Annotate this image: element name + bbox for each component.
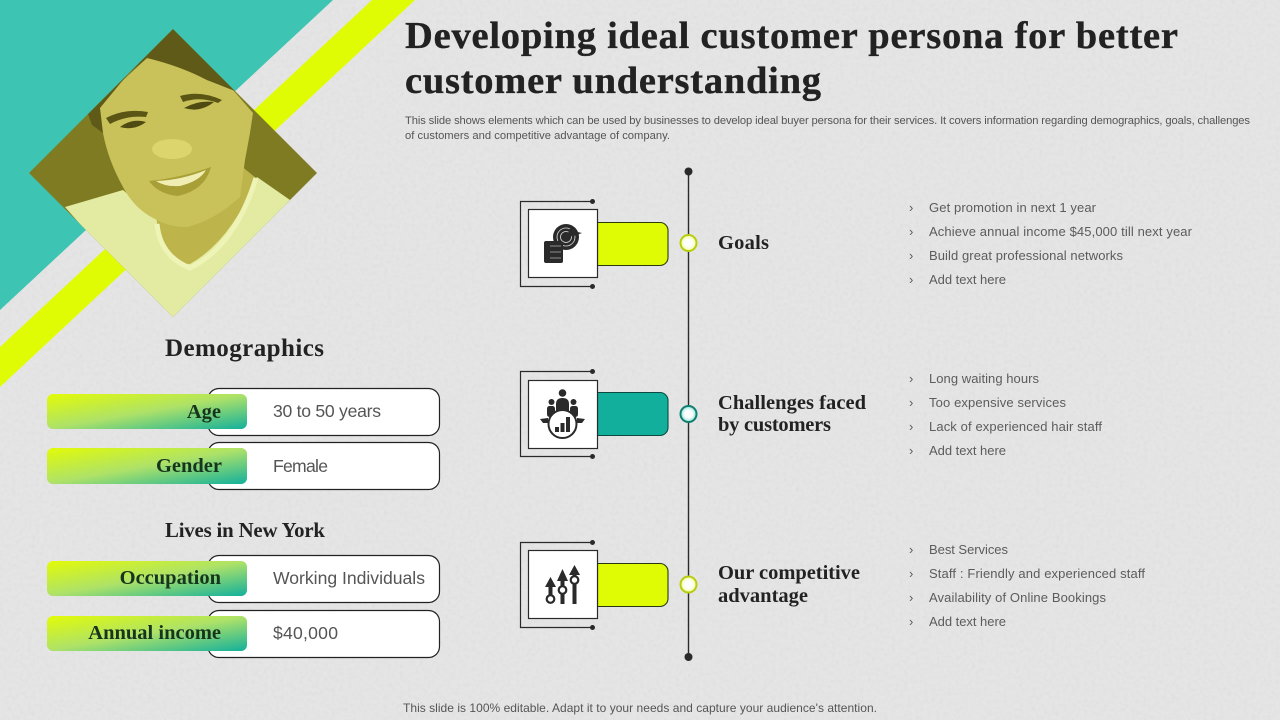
row: occupation — [47, 556, 440, 602]
row: gender: Gender — [156, 455, 222, 477]
competitive advantage block: Our competitive — [718, 562, 860, 584]
eyes — [120, 121, 146, 128]
neck — [155, 165, 256, 264]
competitive advantage block: advantage — [718, 585, 808, 607]
competitive advantage list: › — [909, 542, 913, 557]
collar — [157, 178, 256, 268]
row: occupation: Working Individuals — [273, 568, 425, 588]
row: occupation: Occupation — [120, 567, 222, 589]
challenges list: › — [909, 395, 913, 410]
challenges block — [520, 369, 867, 459]
face — [97, 58, 253, 227]
goals list: Build great professional networks — [929, 248, 1124, 263]
goals list: › — [909, 272, 913, 287]
competitive advantage list: › — [909, 566, 913, 581]
subtitle — [405, 115, 1250, 142]
competitive advantage list: Availability of Online Bookings — [929, 590, 1106, 605]
competitive advantage list — [909, 542, 1145, 629]
subtitle: This slide shows elements which can be used by businesses to develop ideal buyer persona for their services. It covers information regarding demographics, goals, challenges — [405, 115, 1250, 127]
timeline — [684, 168, 692, 661]
competitive advantage list: Best Services — [929, 542, 1008, 557]
teal corner triangle — [0, 0, 333, 310]
row: annual income: Annual income — [88, 622, 221, 644]
competitive advantage list: Staff : Friendly and experienced staff — [929, 566, 1145, 581]
subtitle: of customers and competitive advantage of company. — [405, 130, 670, 142]
persona photo diamond — [29, 29, 317, 330]
goals block — [520, 199, 769, 289]
row: gender — [47, 442, 440, 490]
row: age: 30 to 50 years — [273, 401, 381, 421]
challenges list — [909, 371, 1102, 458]
title — [405, 15, 1178, 102]
goals list: › — [909, 248, 913, 263]
mouth — [149, 167, 211, 196]
goals list: Achieve annual income $45,000 till next year — [929, 224, 1193, 239]
challenges list: › — [909, 419, 913, 434]
heading: demographics: Demographics — [165, 335, 324, 362]
competitive advantage list: › — [909, 614, 913, 629]
challenges list: Lack of experienced hair staff — [929, 419, 1102, 434]
title: Developing ideal customer persona for better — [405, 15, 1178, 57]
competitive advantage list: › — [909, 590, 913, 605]
footer note: This slide is 100% editable. Adapt it to your needs and capture your audience's attention. — [403, 701, 877, 715]
row: age: Age — [187, 401, 221, 423]
challenges list: › — [909, 371, 913, 386]
goals list: Get promotion in next 1 year — [929, 200, 1097, 215]
row: gender: Female — [273, 456, 328, 476]
challenges list: Long waiting hours — [929, 371, 1040, 386]
challenges list: Too expensive services — [929, 395, 1066, 410]
challenges list: › — [909, 443, 913, 458]
title: customer understanding — [405, 60, 821, 102]
hair — [88, 29, 235, 133]
goals list — [909, 200, 1193, 287]
competitive advantage block — [520, 540, 860, 630]
goals block: Goals — [718, 232, 769, 254]
challenges block: by customers — [718, 414, 831, 436]
icon: team and chart — [540, 389, 585, 438]
icon: target and checklist — [544, 224, 582, 263]
goals list: Add text here — [929, 272, 1006, 287]
row: annual income — [47, 610, 440, 658]
eyebrows — [106, 111, 148, 124]
nose — [152, 139, 192, 159]
competitive advantage list: Add text here — [929, 614, 1006, 629]
goals list: › — [909, 200, 913, 215]
shirt — [65, 177, 290, 330]
challenges list: Add text here — [929, 443, 1006, 458]
heading: lives in new york: Lives in New York — [165, 519, 325, 542]
row: age — [47, 388, 440, 436]
icon: arrows and gears — [545, 565, 580, 604]
row: annual income: $40,000 — [273, 623, 338, 643]
challenges block: Challenges faced — [718, 392, 867, 414]
goals list: › — [909, 224, 913, 239]
lime diagonal band — [0, 0, 415, 387]
